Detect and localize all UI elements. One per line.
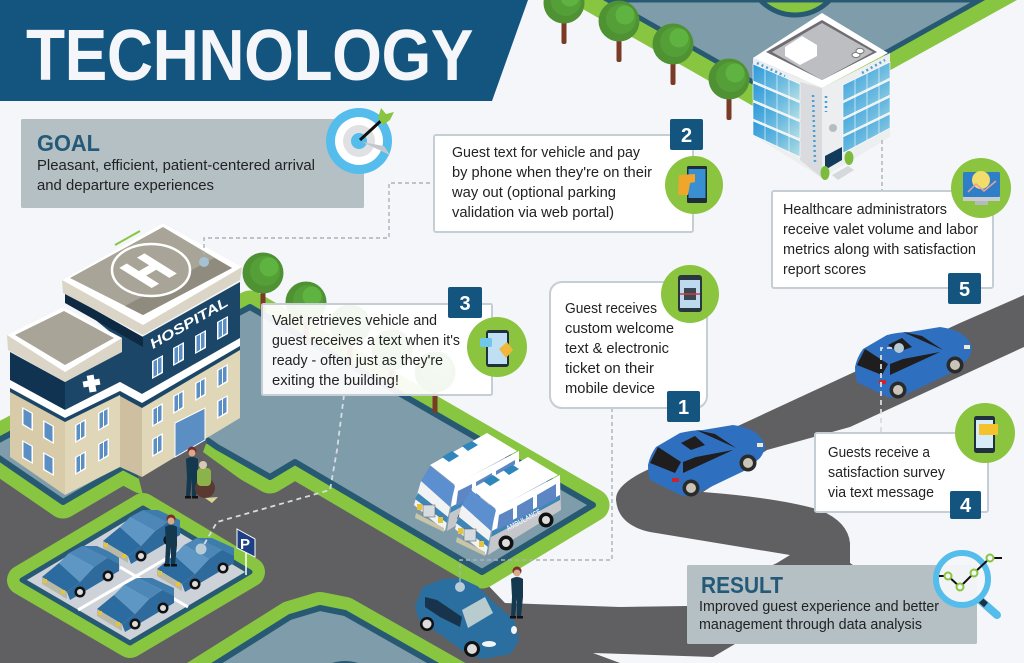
parking sign: P <box>240 536 250 553</box>
entrance doors <box>175 408 205 457</box>
office roof <box>753 13 888 88</box>
result text: Improved guest experience and better <box>699 599 939 615</box>
badge 1: 1 <box>678 397 689 419</box>
helipad marker <box>115 231 140 245</box>
badge 4 <box>950 491 981 519</box>
panel: goal: and departure experiences <box>37 178 214 194</box>
wing roof <box>7 307 122 382</box>
road: left and bottom <box>0 430 687 663</box>
right glass floors <box>843 62 890 153</box>
icon: phone notification <box>467 317 527 377</box>
panel: result <box>687 565 977 644</box>
panel: step 3: guest receives a text when it's <box>272 333 460 349</box>
icon: magnifier chart <box>936 553 1002 615</box>
tower roof <box>62 223 242 335</box>
tower windows <box>152 355 163 379</box>
top right parking lot ground <box>567 0 1017 110</box>
panel: step 1: Guest receives <box>565 301 657 317</box>
helipad marking: H <box>110 248 188 295</box>
panel: step 5 <box>772 158 1011 304</box>
panel: step 5: Healthcare administrators <box>783 202 947 218</box>
small wall windows <box>813 95 815 162</box>
panel: step 2: Guest text for vehicle and pay <box>452 145 641 161</box>
tower middle wall <box>120 330 142 477</box>
panel: step 3: Valet retrieves vehicle and <box>272 313 437 329</box>
parking sign <box>237 529 255 575</box>
wing left face <box>10 352 65 495</box>
panel: step 5: report scores <box>783 262 866 278</box>
goal text: Pleasant, efficient, patient-centered arrival <box>37 158 315 174</box>
valet <box>510 566 523 618</box>
hospital lot ground <box>0 307 593 572</box>
dashed connector: step 1 to hatchback <box>455 408 612 592</box>
panel: step 3 <box>262 287 527 395</box>
badge 1 <box>667 391 700 422</box>
badge 2 <box>670 119 703 150</box>
wing right face <box>65 352 120 495</box>
panel: step 1: ticket on their <box>565 361 654 377</box>
panel: step 1: mobile device <box>565 381 655 397</box>
parked cars <box>42 510 234 632</box>
route cars <box>648 327 972 496</box>
bottom lot ground <box>190 608 470 663</box>
badge 4: 4 <box>960 495 972 517</box>
panel: step 3: ready - often just as they're <box>272 353 443 369</box>
goal heading: GOAL <box>37 130 100 156</box>
badge 2: 2 <box>681 125 692 147</box>
badge 5: 5 <box>959 279 970 301</box>
tower right face <box>142 282 240 477</box>
office entrance <box>825 147 842 170</box>
wing windows <box>75 419 86 443</box>
dashed connector: step 3 to parking <box>196 395 344 554</box>
icon: phone ticket <box>661 265 719 323</box>
dashed connector: step 2 to helipad <box>199 183 433 267</box>
panel: step 2 <box>434 119 723 232</box>
medical cross <box>82 374 101 393</box>
panel: step 1 <box>550 265 719 422</box>
panel: step 2: by phone when they're on their <box>452 165 652 181</box>
trees <box>242 0 750 413</box>
panel: step 1: text & electronic <box>565 341 669 357</box>
dashed connector: step 4 to car <box>881 343 904 432</box>
title banner <box>0 0 528 101</box>
parking lot <box>22 508 250 643</box>
panel: step 4: via text message <box>828 485 934 501</box>
parking attendant <box>164 514 177 566</box>
ambulances: AMBULANCE <box>505 507 542 533</box>
panel: goal <box>21 119 364 208</box>
panel: step 5: metrics along with satisfaction <box>783 242 976 258</box>
panel: step 1: custom welcome <box>565 321 674 337</box>
hospital building <box>7 223 242 495</box>
result heading: RESULT <box>701 572 783 598</box>
icon: target <box>326 108 394 174</box>
panel: step 4: satisfaction survey <box>828 465 946 481</box>
panel: step 4 <box>815 403 1015 519</box>
panel: result: management through data analysis <box>699 617 922 633</box>
road: winding route <box>593 295 1024 657</box>
panel: step 4: Guests receive a <box>828 445 931 461</box>
badge 5 <box>948 273 981 304</box>
tower navy upper band <box>65 282 240 394</box>
icon: phone survey <box>955 403 1015 463</box>
office building <box>753 13 890 180</box>
hospital sign: HOSPITAL <box>147 295 231 352</box>
badge 3 <box>448 287 482 318</box>
badge 3: 3 <box>459 293 471 315</box>
guard with wheelchair <box>185 446 218 503</box>
ambulances <box>414 433 561 556</box>
panel: step 5: receive valet volume and labor <box>783 222 978 238</box>
panel: step 2: way out (optional parking <box>451 185 616 201</box>
dashed connector: step 5 to office <box>829 124 882 191</box>
panel: step 2: validation via web portal) <box>452 205 614 221</box>
panel: step 3: exiting the building! <box>272 373 399 389</box>
icon: metrics monitor <box>951 158 1011 218</box>
hatchback car <box>416 579 518 658</box>
icon: phone payment <box>665 156 723 214</box>
left glass floors <box>753 64 800 157</box>
title: TECHNOLOGY <box>26 16 473 96</box>
